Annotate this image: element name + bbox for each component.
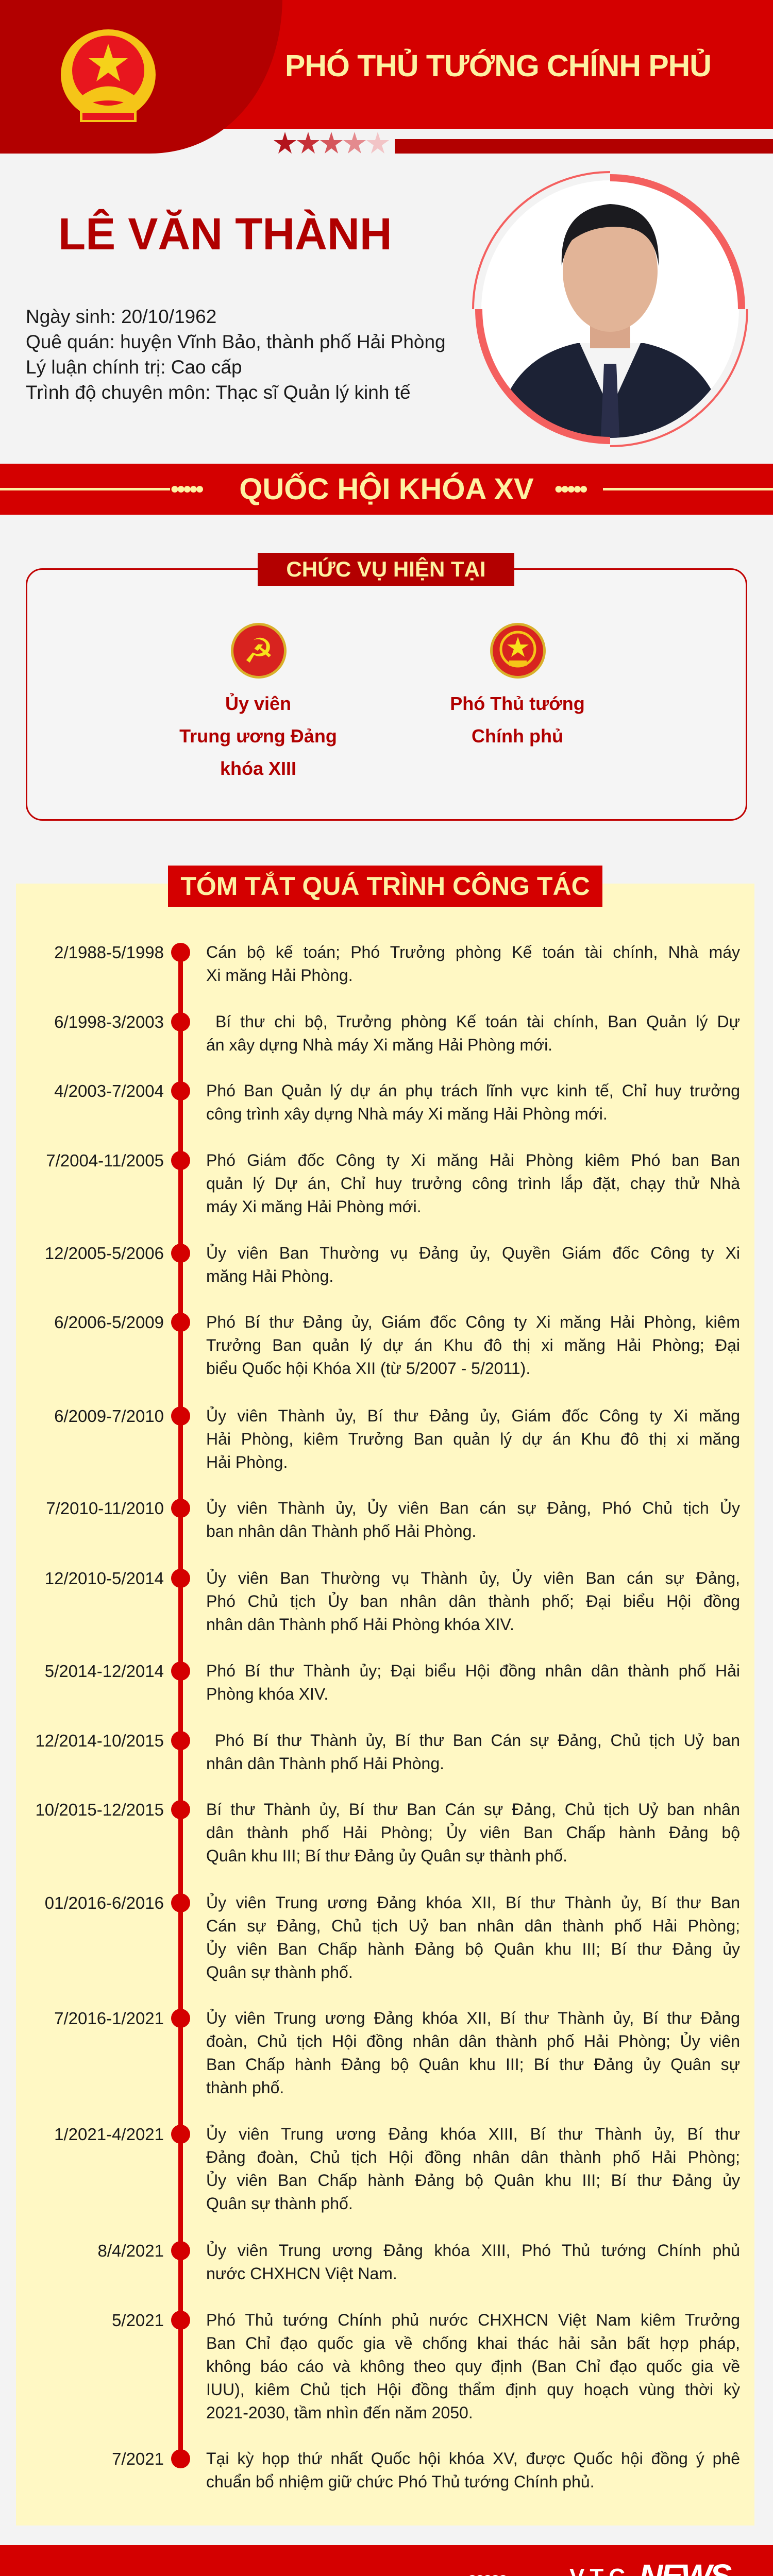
timeline entry 16: 8/4/2021 [98, 2241, 164, 2260]
timeline entry 1: 2/1988-5/1998 [54, 943, 164, 962]
icon: state emblem [490, 623, 546, 679]
timeline entry 18: Tại kỳ họp thứ nhất Quốc hội khóa XV, được Quốc hội đồng ý phê [206, 2449, 740, 2468]
timeline entry 15: 1/2021-4/2021 [54, 2125, 164, 2144]
timeline entry 13 [45, 1893, 740, 1981]
personal info text: Lý luận chính trị: Cao cấp [26, 357, 242, 378]
timeline entry 9: Phó Chủ tịch Ủy ban nhân dân thành phố; Đại biểu Hội đồng [206, 1592, 740, 1611]
text: party position: khóa XIII [220, 758, 296, 779]
text: party position: Ủy viên [225, 693, 291, 714]
icon: national emblem [61, 29, 156, 122]
timeline entry 10: Phòng khóa XIV. [206, 1685, 328, 1703]
timeline entry 1: Xi măng Hải Phòng. [206, 966, 353, 985]
panel: current positions [26, 568, 747, 821]
timeline entry 4: Phó Giám đốc Công ty Xi măng Hải Phòng kiêm Phó ban Ban [206, 1151, 740, 1170]
timeline entry 15: Quân sự thành phố. [206, 2194, 353, 2213]
icon: party emblem [231, 623, 287, 679]
logo: VTC NEWS [569, 2557, 732, 2576]
name heading: LÊ VĂN THÀNH [58, 209, 392, 259]
icon: party emblem: ☭ [243, 631, 274, 671]
timeline entry 7 [54, 1406, 740, 1471]
timeline entry 14: Ủy viên Trung ương Đảng khóa XII, Bí thư Thành ủy, Bí thư Đảng [206, 2009, 740, 2027]
timeline entry 2 [54, 1012, 740, 1054]
heading: TÓM TẮT QUÁ TRÌNH CÔNG TÁC: TÓM TẮT QUÁ TRÌNH CÔNG TÁC [180, 872, 590, 901]
text: party position: Trung ương Đảng [179, 725, 337, 747]
timeline entry 16: nước CHXHCN Việt Nam. [206, 2264, 397, 2283]
timeline entry 11: nhân dân Thành phố Hải Phòng. [206, 1754, 444, 1773]
timeline entry 5: măng Hải Phòng. [206, 1267, 333, 1285]
timeline entry 1: Cán bộ kế toán; Phó Trưởng phòng Kế toán tài chính, Nhà máy [206, 943, 740, 961]
timeline entry 7: 6/2009-7/2010 [54, 1406, 164, 1426]
timeline entry 2: án xây dựng Nhà máy Xi măng Hải Phòng mới. [206, 1036, 552, 1054]
timeline entry 5: Ủy viên Ban Thường vụ Đảng ủy, Quyền Giám đốc Công ty Xi [206, 1244, 740, 1262]
timeline entry 6: Phó Bí thư Đảng ủy, Giám đốc Công ty Xi măng Hải Phòng, kiêm [206, 1313, 740, 1331]
timeline entry 18: chuẩn bổ nhiệm giữ chức Phó Thủ tướng Chính phủ. [206, 2472, 595, 2491]
timeline entry 10: Phó Bí thư Thành ủy; Đại biểu Hội đồng nhân dân thành phố Hải [206, 1662, 740, 1680]
timeline entry 4: 7/2004-11/2005 [46, 1151, 164, 1170]
timeline entry 1 [54, 943, 740, 985]
stars decoration [274, 132, 389, 154]
timeline entry 17: không báo cáo và không theo quy định (Ban Chỉ đạo quốc gia về [206, 2357, 740, 2376]
timeline entry 14: 7/2016-1/2021 [54, 2009, 164, 2028]
timeline entry 2: Bí thư chi bộ, Trưởng phòng Kế toán tài chính, Ban Quản lý Dự [215, 1012, 740, 1031]
personal info text: Quê quán: huyện Vĩnh Bảo, thành phố Hải Phòng [26, 331, 446, 352]
timeline entry 14: thành phố. [206, 2078, 284, 2097]
timeline entry 15: Ủy viên Trung ương Đảng khóa XIII, Bí thư Thành ủy, Bí thư [206, 2125, 740, 2143]
timeline entry 15 [54, 2125, 740, 2213]
timeline entry 11: 12/2014-10/2015 [35, 1731, 164, 1750]
heading: CHỨC VỤ HIỆN TẠI: CHỨC VỤ HIỆN TẠI [286, 557, 486, 581]
personal info text [26, 306, 446, 403]
timeline entry 4 [46, 1151, 740, 1216]
timeline entry 9: 12/2010-5/2014 [45, 1569, 164, 1588]
timeline entry 10 [45, 1662, 740, 1703]
timeline entry 7: Hải Phòng. [206, 1453, 288, 1471]
timeline entry 9: Ủy viên Ban Thường vụ Thành ủy, Ủy viên Ban cán sự Đảng, [206, 1569, 740, 1587]
timeline entry 18 [112, 2449, 740, 2491]
timeline entry 10: 5/2014-12/2014 [45, 1662, 164, 1681]
timeline entry 17: IUU), kiêm Chủ tịch Hội đồng thẩm định quy hoạch vùng thời kỳ [206, 2380, 740, 2399]
timeline entry 3: Phó Ban Quản lý dự án phụ trách lĩnh vực kinh tế, Chỉ huy trưởng [206, 1081, 740, 1100]
timeline entry 12: 10/2015-12/2015 [35, 1800, 164, 1819]
banner: QUỐC HỘI KHÓA XV: QUỐC HỘI KHÓA XV [239, 472, 534, 506]
heading: TÓM TẮT QUÁ TRÌNH CÔNG TÁC [168, 866, 602, 907]
timeline entry 7: Hải Phòng, kiêm Trưởng Ban quản lý dự án Khu đô thị xi măng [206, 1430, 740, 1448]
text: government position [450, 693, 585, 747]
timeline entry 14: đoàn, Chủ tịch Hội đồng nhân dân thành phố Hải Phòng; Ủy viên [206, 2032, 740, 2050]
timeline entry 12: Bí thư Thành ủy, Bí thư Ban Cán sự Đảng, Chủ tịch Uỷ ban nhân [206, 1800, 740, 1819]
timeline entry 13: Ủy viên Ban Chấp hành Đảng bộ Quân khu III; Bí thư Đảng ủy [206, 1940, 740, 1958]
footer band [0, 2545, 773, 2576]
banner: QUỐC HỘI KHÓA XV [0, 464, 773, 515]
timeline entry 9: nhân dân Thành phố Hải Phòng khóa XIV. [206, 1615, 514, 1634]
timeline entry 5 [45, 1244, 740, 1285]
timeline entry 13: Cán sự Đảng, Chủ tịch Uỷ ban nhân dân thành phố Hải Phòng; [206, 1917, 740, 1935]
portrait photo with ring [472, 171, 748, 447]
timeline entry 14: Ban Chấp hành Đảng bộ Quân khu III; Bí thư Đảng ủy Quân sự [206, 2055, 740, 2074]
personal info text: Trình độ chuyên môn: Thạc sĩ Quản lý kinh tế [26, 382, 411, 403]
timeline entry 2: 6/1998-3/2003 [54, 1012, 164, 1031]
timeline entry 6: Trưởng Ban quản lý dự án Khu đô thị xi măng Hải Phòng; Đại [206, 1336, 740, 1354]
timeline entry 3 [54, 1081, 740, 1123]
timeline entry 11 [35, 1731, 740, 1773]
timeline entry 17 [112, 2311, 740, 2422]
header red bar [395, 139, 773, 154]
timeline entry 12: Quân khu III; Bí thư Đảng ủy Quân sự thành phố. [206, 1846, 567, 1865]
panel: career timeline background [16, 884, 754, 2526]
timeline entry 8: 7/2010-11/2010 [46, 1499, 164, 1518]
timeline entry 5: 12/2005-5/2006 [45, 1244, 164, 1263]
timeline entry 14 [54, 2008, 740, 2097]
timeline entry 15: Ủy viên Ban Chấp hành Đảng bộ Quân khu III; Bí thư Đảng ủy [206, 2171, 740, 2190]
heading: CHỨC VỤ HIỆN TẠI [258, 553, 514, 586]
timeline entry 8: ban nhân dân Thành phố Hải Phòng. [206, 1522, 476, 1540]
timeline axis [178, 952, 183, 2459]
timeline entry 17: Phó Thủ tướng Chính phủ nước CHXHCN Việt Nam kiêm Trưởng [206, 2311, 740, 2329]
timeline entry 8 [46, 1498, 740, 1540]
timeline entry 4: quản lý Dự án, Chỉ huy trưởng công trình lắp đặt, chạy thử Nhà [206, 1174, 740, 1193]
timeline entry 13: 01/2016-6/2016 [45, 1893, 164, 1912]
timeline entry 9 [45, 1568, 740, 1634]
timeline entry 13: Ủy viên Trung ương Đảng khóa XII, Bí thư Thành ủy, Bí thư Ban [206, 1893, 740, 1912]
personal info text: Ngày sinh: 20/10/1962 [26, 306, 216, 327]
timeline entry 6 [54, 1313, 740, 1378]
title: PHÓ THỦ TƯỚNG CHÍNH PHỦ: PHÓ THỦ TƯỚNG CHÍNH PHỦ [285, 49, 711, 83]
timeline entry 13: Quân sự thành phố. [206, 1963, 353, 1981]
timeline entry 17: 5/2021 [112, 2311, 164, 2330]
text: government position: Phó Thủ tướng [450, 693, 585, 714]
timeline entry 12 [35, 1800, 740, 1865]
timeline entry 4: máy Xi măng Hải Phòng mới. [206, 1197, 422, 1216]
timeline entry 3: công trình xây dựng Nhà máy Xi măng Hải Phòng mới. [206, 1105, 608, 1123]
timeline entry 3: 4/2003-7/2004 [54, 1081, 164, 1100]
timeline entry 6: biểu Quốc hội Khóa XII (từ 5/2007 - 5/2011). [206, 1359, 530, 1378]
timeline entry 12: dân thành phố Hải Phòng; Ủy viên Ban Chấp hành Đảng bộ [206, 1823, 740, 1842]
header dark emblem area [0, 0, 282, 154]
text: government position: Chính phủ [472, 725, 563, 747]
timeline entry 16 [98, 2241, 740, 2283]
timeline entry 6: 6/2006-5/2009 [54, 1313, 164, 1332]
timeline entry 7: Ủy viên Thành ủy, Bí thư Đảng ủy, Giám đốc Công ty Xi măng [206, 1406, 740, 1425]
timeline entry 17: Ban Chỉ đạo quốc gia về chống khai thác hải sản bất hợp pháp, [206, 2334, 740, 2352]
timeline entry 16: Ủy viên Trung ương Đảng khóa XIII, Phó Thủ tướng Chính phủ [206, 2241, 740, 2260]
timeline entry 15: Đảng đoàn, Chủ tịch Hội đồng nhân dân thành phố Hải Phòng; [206, 2148, 740, 2166]
timeline entry 8: Ủy viên Thành ủy, Ủy viên Ban cán sự Đảng, Phó Chủ tịch Ủy [206, 1499, 740, 1517]
timeline entry 18: 7/2021 [112, 2449, 164, 2468]
text: party position [179, 693, 337, 779]
timeline entry 11: Phó Bí thư Thành ủy, Bí thư Ban Cán sự Đảng, Chủ tịch Uỷ ban [215, 1731, 740, 1750]
header band [0, 0, 773, 129]
timeline entry 17: 2021-2030, tầm nhìn đến năm 2050. [206, 2403, 473, 2422]
